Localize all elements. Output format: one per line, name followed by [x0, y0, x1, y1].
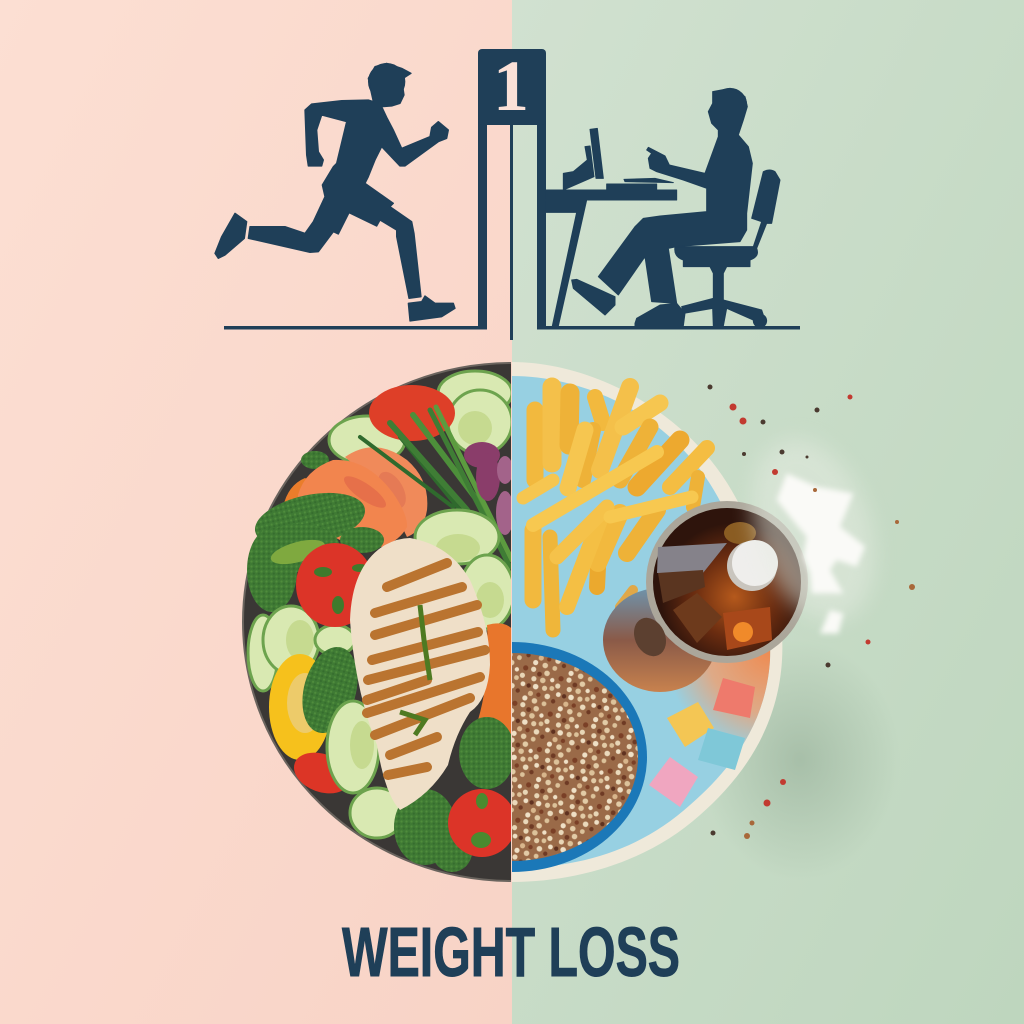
broccoli large: [247, 484, 384, 612]
french fries: [523, 387, 707, 630]
panel: activity illustration: [215, 46, 800, 340]
icon: number one sign: [478, 46, 546, 126]
spilled sugar: [731, 424, 896, 636]
ground line and posts: [224, 120, 800, 340]
figure body: [598, 88, 752, 303]
red tomato with seeds: [296, 543, 374, 627]
soda glass and bottle: [646, 501, 808, 663]
cucumber slices back: [329, 371, 512, 464]
green onions: [360, 407, 512, 567]
cucumber slices right: [415, 510, 514, 629]
red onions: [464, 442, 514, 535]
dark plate: [242, 362, 511, 882]
red tomato top: [369, 385, 455, 441]
peach reflection: [677, 650, 770, 743]
cucumbers bottom: [327, 701, 404, 838]
background: left peach panel: [0, 0, 512, 1024]
background: right green panel: [512, 0, 1024, 1024]
man head: [713, 88, 747, 122]
shoes: [572, 279, 685, 326]
reflection: [657, 543, 727, 573]
bottle cap: [727, 541, 777, 591]
icon: number one sign: 1: [493, 46, 529, 126]
plate rim: [512, 362, 782, 882]
candy cubes: [649, 678, 755, 807]
broccoli bottom: [394, 717, 515, 872]
title: WEIGHT LOSS: [342, 913, 680, 991]
yellow pepper: [269, 654, 331, 760]
office chair: [675, 170, 780, 327]
broccoli by pepper: [302, 647, 358, 733]
desk and monitor: [546, 128, 677, 326]
soda glass base: [603, 588, 717, 692]
icon: runner silhouette: [215, 63, 455, 321]
red pepper slice: [294, 752, 342, 794]
orange slices: [283, 447, 427, 547]
small broccoli: [301, 451, 329, 469]
plate shadow: [700, 640, 900, 880]
spice specks: [708, 384, 915, 839]
carrot: [478, 623, 513, 735]
grilled chicken breast: [350, 538, 490, 810]
panel: unhealthy half plate: [512, 362, 915, 882]
textured straw wrap: [628, 613, 672, 661]
plate blue centre: [512, 376, 770, 868]
panel: healthy half plate: [242, 362, 511, 882]
cucumbers lower left: [248, 606, 355, 691]
tomato bottom right: [448, 789, 516, 857]
quinoa bowl: [512, 642, 647, 872]
ice cubes: [658, 570, 705, 603]
icon: seated man at desk: [546, 88, 780, 327]
